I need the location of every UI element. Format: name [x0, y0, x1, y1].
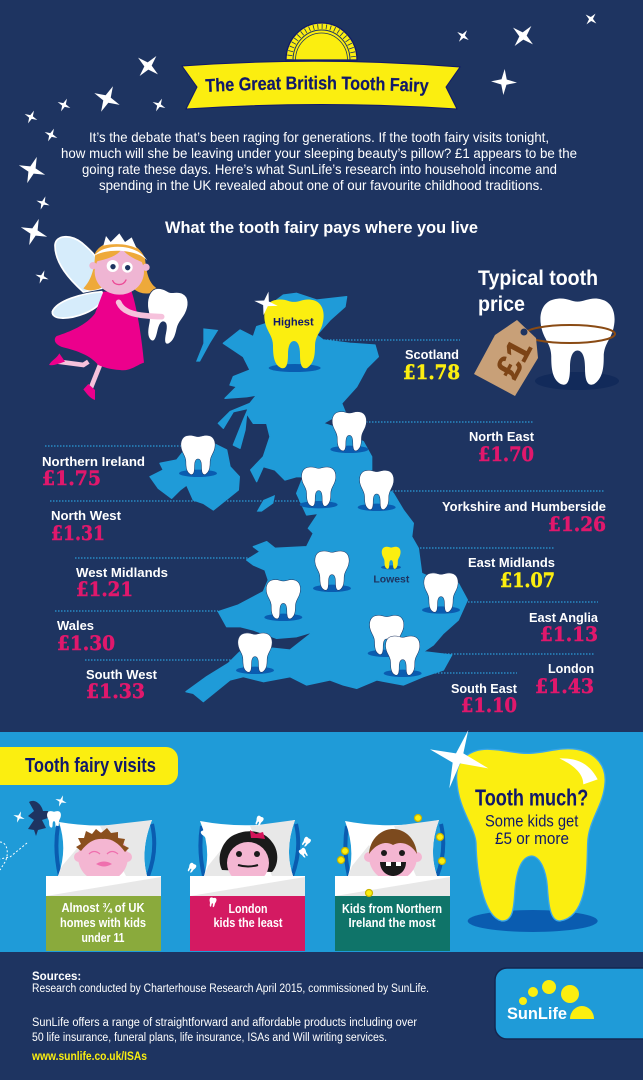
panel: tooth fairy visits [0, 730, 643, 952]
caption [60, 901, 146, 945]
wings [52, 237, 104, 318]
region: Yorkshire and Humberside [442, 499, 606, 536]
caption [214, 902, 283, 930]
region: Northern Ireland [42, 454, 145, 490]
region: East Anglia [529, 610, 599, 646]
icon: price tag with string [474, 320, 615, 396]
region: West Midlands: £1.21 [76, 577, 133, 601]
footer sources: SunLife offers a range of straightforward and affordable products including over [32, 1017, 417, 1029]
region: Northern Ireland: Northern Ireland [42, 454, 145, 469]
caption: London [228, 902, 268, 916]
bed: Northern Ireland [335, 814, 450, 951]
arm [119, 302, 162, 317]
region: London [535, 661, 594, 698]
region: Yorkshire and Humberside: £1.26 [548, 512, 606, 536]
heading: what the tooth fairy pays: What the tooth fairy pays where you live [165, 218, 478, 237]
title: The Great British Tooth Fairy [205, 76, 429, 96]
child: gap-toothed kid [364, 829, 422, 881]
region: South West: £1.33 [86, 679, 145, 703]
highest tooth [252, 289, 324, 368]
icon: large tooth [535, 299, 619, 390]
dotted leader lines [45, 340, 605, 673]
bed: UK homes [46, 820, 161, 951]
region: South West: South West [86, 667, 158, 682]
title banner [181, 60, 461, 110]
caption: Ireland the most [348, 916, 436, 930]
region: Wales [57, 618, 115, 655]
intro text: spending in the UK revealed about one of our favourite childhood traditions. [99, 177, 543, 193]
highest tooth: Highest [273, 316, 314, 328]
logo: SunLife [495, 968, 643, 1039]
icon: flying fairy silhouette [0, 793, 69, 870]
footer sources [31, 971, 429, 1063]
region: Scotland [403, 347, 460, 384]
region: North West [51, 508, 122, 545]
UK map [150, 289, 467, 702]
child: sleeping boy [74, 828, 132, 882]
typical tooth price block [474, 267, 619, 396]
region: London: London [548, 661, 594, 676]
region: Wales: £1.30 [57, 631, 115, 655]
region: North West: North West [51, 508, 122, 523]
bed: London [186, 815, 312, 951]
region: North West: £1.31 [51, 521, 105, 545]
stars [14, 9, 601, 286]
region: Northern Ireland: £1.75 [42, 466, 101, 490]
region: South East: South East [451, 681, 518, 696]
footer sources: Sources: [32, 971, 81, 983]
region: South East [451, 681, 518, 717]
tooth in hand [140, 286, 190, 347]
callout: tooth much: £5 or more [495, 829, 569, 848]
gold coins [338, 814, 446, 896]
child: girl with bow [220, 830, 277, 884]
illustration: tooth fairy [49, 233, 190, 400]
callout: tooth much: Some kids get [485, 812, 579, 831]
map teeth [179, 364, 460, 677]
region: Yorkshire and Humberside: Yorkshire and Humberside [442, 499, 606, 514]
heading: tooth fairy visits: Tooth fairy visits [25, 755, 156, 777]
footer sources: Research conducted by Charterhouse Research April 2015, commissioned by SunLife. [32, 983, 429, 995]
hair back [83, 241, 158, 293]
caption: Kids from Northern [342, 902, 442, 916]
heading: typical tooth price: Typical tooth [478, 267, 598, 290]
logo: SunLife: SunLife [507, 1004, 567, 1023]
region: East Anglia: £1.13 [540, 622, 598, 646]
intro text: It’s the debate that’s been raging for generations. If the tooth fairy visits tonight, [89, 129, 549, 145]
callout: tooth much [430, 730, 605, 932]
caption [342, 902, 442, 930]
icon: half sun coin [286, 23, 357, 60]
Outer Hebrides [196, 328, 218, 362]
caption: Almost ¾ of UK [62, 901, 144, 915]
small teeth [186, 815, 312, 908]
region: North East: North East [469, 429, 535, 444]
intro text [61, 129, 577, 193]
intro text: going rate these days. Here’s what SunLife’s research into household income and [82, 161, 557, 177]
callout: tooth much: Tooth much? [475, 784, 588, 810]
lowest tooth: Lowest [373, 575, 410, 586]
Northern Ireland [150, 437, 239, 510]
caption: homes with kids [60, 916, 146, 930]
region: London: £1.43 [535, 674, 594, 698]
lowest tooth [373, 547, 410, 586]
face [89, 233, 150, 295]
region: North East [469, 429, 535, 466]
footer sources: www.sunlife.co.uk/ISAs [31, 1051, 147, 1063]
heading: typical tooth price [478, 267, 598, 316]
region: East Midlands: East Midlands [468, 555, 555, 570]
caption: kids the least [214, 916, 283, 930]
region: East Anglia: East Anglia [529, 610, 599, 625]
region: Scotland: £1.78 [403, 360, 460, 384]
footer sources: 50 life insurance, funeral plans, life insurance, ISAs and Will writing services. [32, 1032, 387, 1044]
region: North East: £1.70 [478, 442, 534, 466]
region: West Midlands [76, 565, 168, 601]
region: South East: £1.10 [461, 693, 517, 717]
heading: tooth fairy visits [0, 747, 178, 785]
dress [55, 292, 144, 370]
region: South West [86, 667, 158, 703]
Isle of Man [257, 495, 275, 512]
heading: typical tooth price: price [478, 293, 525, 316]
region: Scotland: Scotland [405, 347, 459, 362]
region: West Midlands: West Midlands [76, 565, 168, 580]
intro text: how much will she be leaving under your sleeping beauty’s pillow? £1 appears to be the [61, 145, 577, 161]
region: Wales: Wales [57, 618, 94, 633]
legs and shoes [49, 353, 100, 400]
region: East Midlands [468, 555, 555, 592]
icon: price tag with string: £1 [489, 334, 540, 385]
region: East Midlands: £1.07 [500, 568, 555, 592]
caption: under 11 [82, 931, 125, 945]
Great Britain [186, 293, 467, 702]
